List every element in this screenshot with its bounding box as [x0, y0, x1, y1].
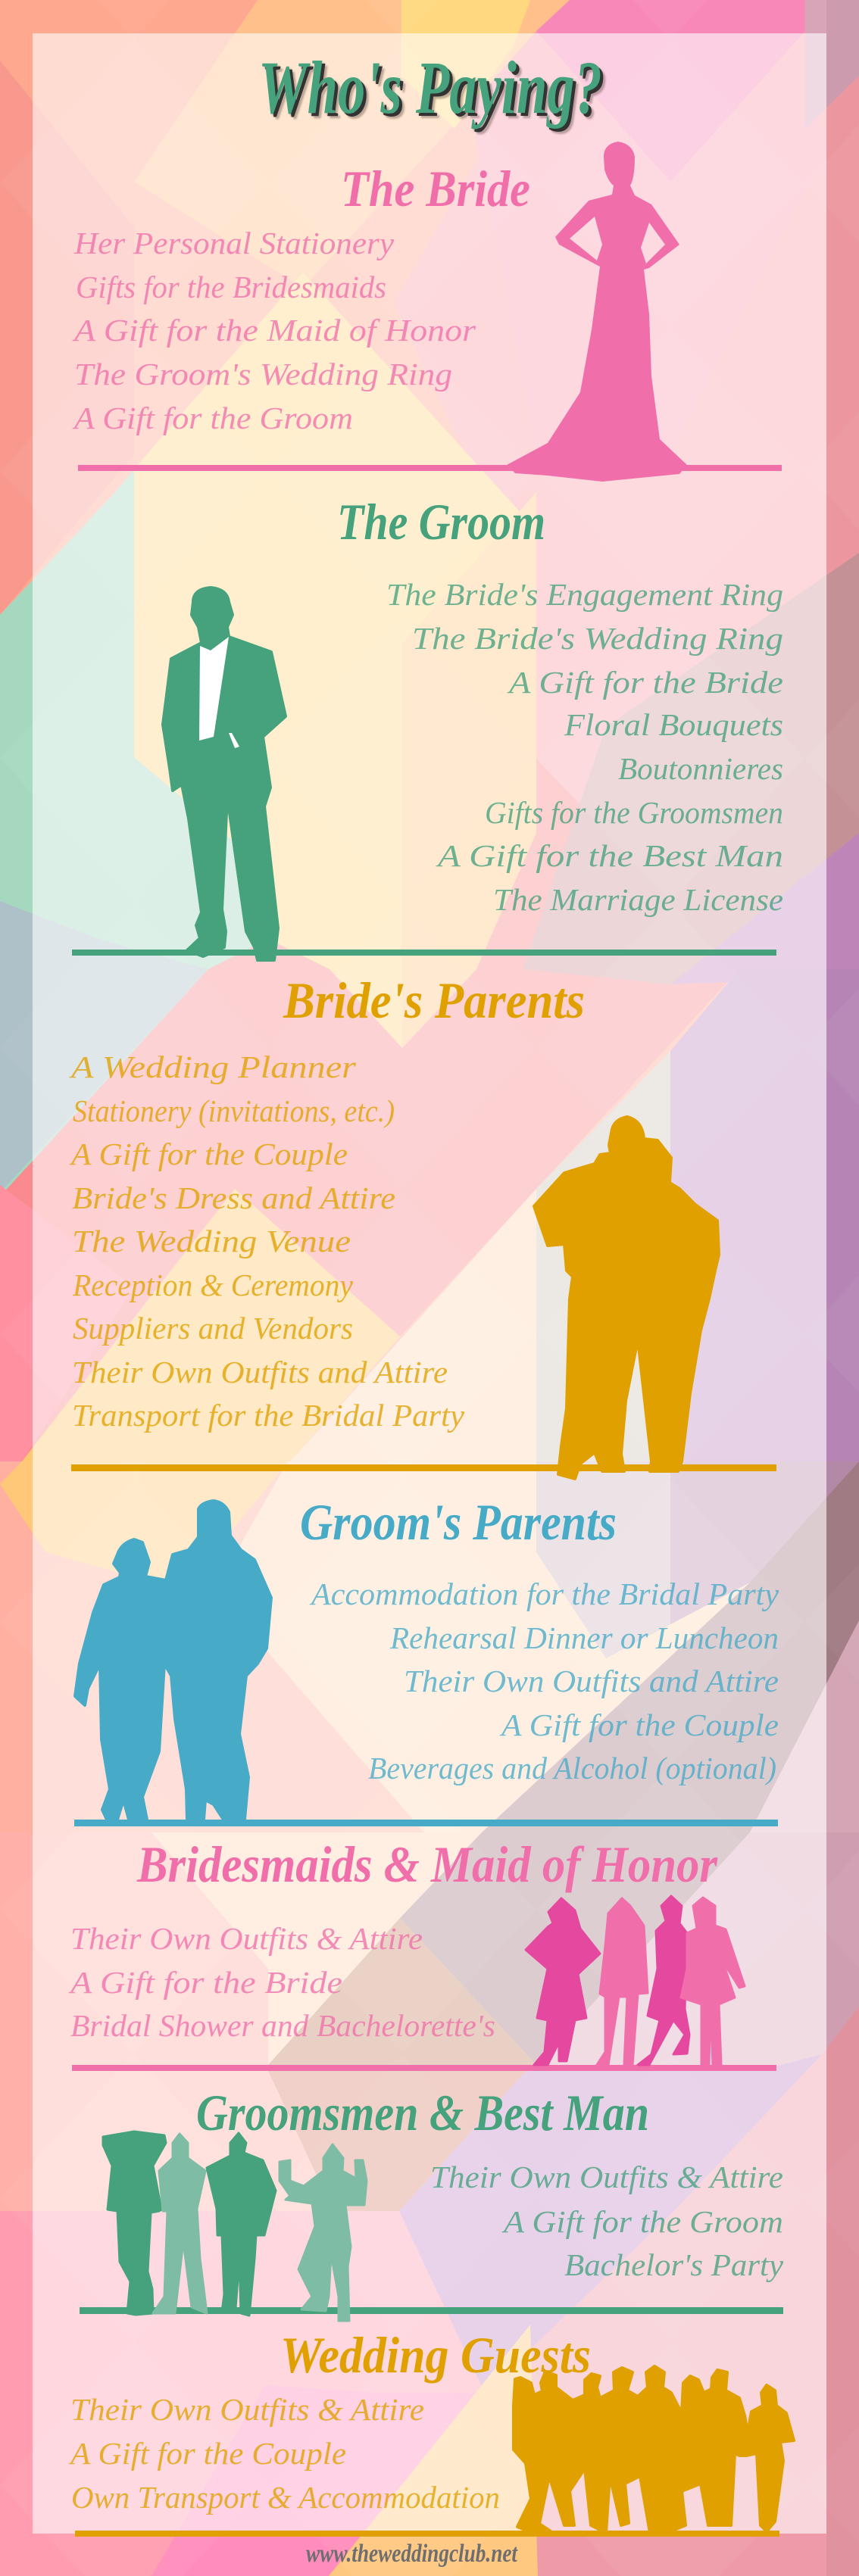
icon: bride silhouette — [507, 142, 687, 482]
section: The Groom — [72, 493, 783, 960]
list: bride's parents: Their Own Outfits and Attire — [72, 1355, 448, 1389]
list: groom: Boutonnieres — [618, 751, 783, 786]
list: bride's parents: Transport for the Bridal Party — [72, 1398, 465, 1433]
icon: groom silhouette — [163, 588, 286, 960]
list: bride: Gifts for the Bridesmaids — [76, 270, 386, 304]
divider: groom — [72, 950, 776, 956]
list: groom: A Gift for the Bride — [507, 665, 783, 700]
list: groom: A Gift for the Best Man — [435, 838, 783, 873]
list: bridesmaids: Bridal Shower and Bachelorette's — [70, 2008, 495, 2043]
divider: groom's parents — [74, 1820, 778, 1826]
list: guests — [68, 2392, 500, 2515]
divider: bridesmaids — [72, 2065, 776, 2071]
section: Bridesmaids & Maid of Honor — [68, 1835, 776, 2071]
section: The Bride — [72, 142, 782, 482]
list: groom's parents: Rehearsal Dinner or Luncheon — [389, 1620, 779, 1655]
list: groom's parents: Beverages and Alcohol (optional) — [368, 1751, 776, 1785]
section: Wedding Guests — [68, 2326, 794, 2537]
list: groomsmen — [430, 2160, 784, 2282]
list: guests: A Gift for the Couple — [68, 2436, 346, 2471]
icon: groomsmen silhouettes — [103, 2132, 367, 2321]
heading: Groomsmen & Best Man: Groomsmen & Best Man — [196, 2084, 649, 2141]
title: Who's Paying? — [258, 45, 602, 129]
list: groom: The Bride's Wedding Ring — [412, 621, 783, 656]
list: groom's parents: Accommodation for the Bridal Party — [309, 1576, 779, 1611]
list: groom's parents — [309, 1576, 779, 1785]
list: bride: Her Personal Stationery — [73, 226, 395, 260]
list: bridesmaids: Their Own Outfits & Attire — [70, 1921, 423, 1956]
section: Bride's Parents — [68, 971, 776, 1479]
list: bride's parents: Stationery (invitations, etc.) — [73, 1093, 395, 1128]
list: groomsmen: A Gift for the Groom — [501, 2204, 783, 2239]
icon: couple silhouette — [534, 1117, 719, 1479]
list: groomsmen: Their Own Outfits & Attire — [430, 2160, 783, 2194]
list: bride: The Groom's Wedding Ring — [74, 357, 452, 391]
list: bride's parents: A Wedding Planner — [68, 1049, 357, 1084]
list: groom: Floral Bouquets — [564, 707, 783, 742]
list: groomsmen: Bachelor's Party — [564, 2247, 784, 2282]
icon: couple silhouette — [75, 1501, 271, 1820]
list: bride's parents: Suppliers and Vendors — [73, 1311, 353, 1346]
icon: guests silhouette — [514, 2366, 794, 2533]
list: groom: The Marriage License — [493, 882, 783, 917]
list: groom's parents: A Gift for the Couple — [499, 1707, 779, 1742]
section: Groomsmen & Best Man — [80, 2084, 784, 2321]
list: bridesmaids — [68, 1921, 495, 2043]
list: bride's parents: The Wedding Venue — [72, 1224, 351, 1258]
footer url: www.theweddingclub.net — [306, 2540, 518, 2568]
divider: groomsmen — [80, 2307, 783, 2314]
heading: Bride's Parents: Bride's Parents — [283, 971, 585, 1029]
divider: bride's parents — [71, 1464, 776, 1471]
list: bride: A Gift for the Maid of Honor — [72, 313, 476, 348]
heading: The Groom: The Groom — [337, 493, 545, 550]
list: guests: Their Own Outfits & Attire — [70, 2392, 424, 2427]
list: bride's parents: Reception & Ceremony — [72, 1268, 354, 1302]
list: groom's parents: Their Own Outfits and Attire — [404, 1664, 779, 1698]
section: Groom's Parents — [74, 1493, 779, 1826]
list: bride's parents — [68, 1049, 465, 1433]
list: bride's parents: A Gift for the Couple — [69, 1137, 348, 1171]
list: groom: Gifts for the Groomsmen — [485, 795, 783, 830]
heading: Wedding Guests: Wedding Guests — [280, 2326, 591, 2384]
heading: The Bride: The Bride — [341, 160, 530, 217]
list: groom: The Bride's Engagement Ring — [386, 577, 783, 612]
divider: guests — [75, 2531, 779, 2537]
list: guests: Own Transport & Accommodation — [71, 2480, 500, 2515]
list: groom — [386, 577, 783, 917]
divider: bride — [78, 465, 782, 471]
list: bride: A Gift for the Groom — [72, 401, 353, 435]
icon: bridesmaids silhouettes — [526, 1896, 745, 2065]
list: bride's parents: Bride's Dress and Attire — [72, 1180, 395, 1215]
list: bridesmaids: A Gift for the Bride — [68, 1965, 342, 2000]
heading: Bridesmaids & Maid of Honor: Bridesmaids & Maid of Honor — [136, 1835, 717, 1893]
heading: Groom's Parents: Groom's Parents — [300, 1493, 617, 1551]
list: bride — [72, 226, 476, 435]
